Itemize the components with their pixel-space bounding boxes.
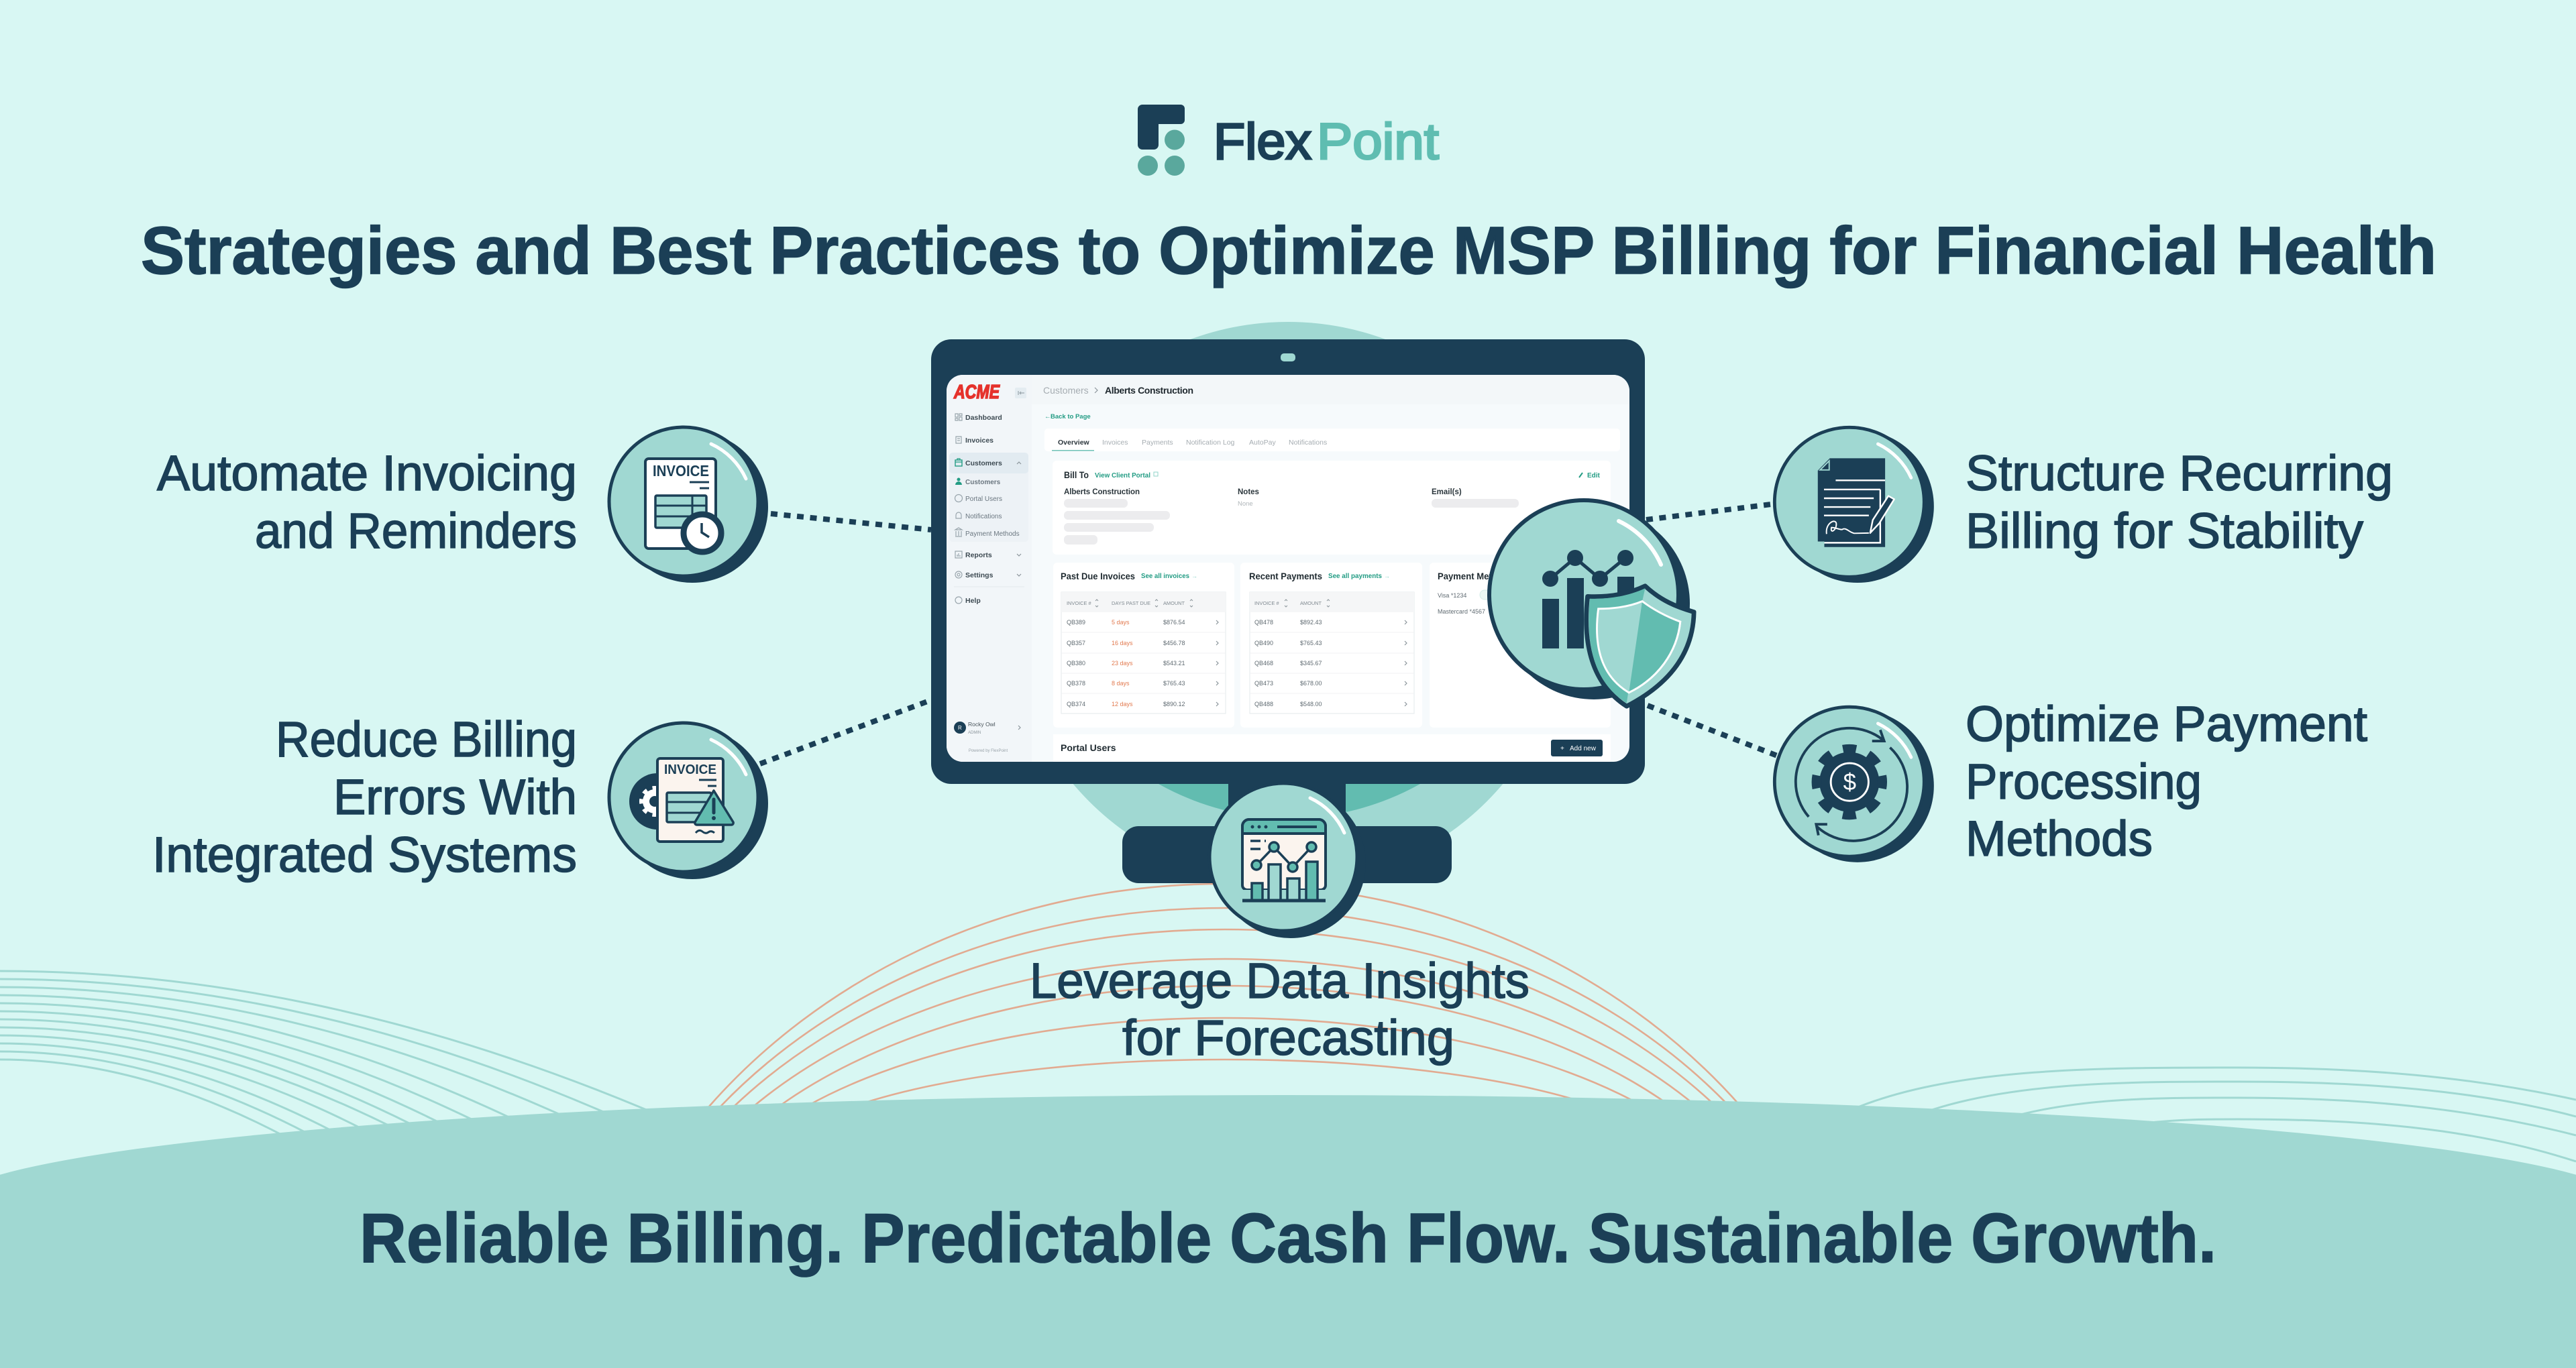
breadcrumb header: ← xyxy=(1044,413,1051,420)
tabs: Payments xyxy=(1142,439,1173,447)
tabs: Notifications xyxy=(1289,439,1327,447)
shield xyxy=(1587,586,1694,706)
label: structure recurring billing xyxy=(1966,445,2393,559)
card: portal users: Portal Users xyxy=(1061,742,1116,753)
card: past due invoices: See all invoices xyxy=(1141,573,1189,580)
card: bill to: None xyxy=(1238,500,1253,508)
icon: gear with dollar sign xyxy=(1774,707,1934,862)
tabs: Invoices xyxy=(1102,439,1128,447)
card: past due invoices: QB357 xyxy=(1067,640,1085,646)
card: recent payments: QB468 xyxy=(1254,660,1273,667)
card: recent payments: $765.43 xyxy=(1300,640,1322,646)
label: automate invoicing xyxy=(157,445,577,559)
card: payment methods: Payment Methods xyxy=(1438,571,1513,581)
icon: signed contract xyxy=(1774,427,1934,583)
breadcrumb header: Back to Page xyxy=(1051,413,1091,420)
sidebar: Payment Methods xyxy=(965,530,1020,538)
card: past due invoices: INVOICE # xyxy=(1067,600,1091,606)
card: recent payments: $678.00 xyxy=(1300,680,1322,687)
card: recent payments: $548.00 xyxy=(1300,701,1322,707)
card: past due invoices: QB374 xyxy=(1067,701,1085,707)
monitor stand xyxy=(1122,778,1452,883)
label: optimize payment processing: Optimize Payment xyxy=(1966,696,2367,752)
sidebar: R xyxy=(958,725,962,731)
label: optimize payment processing xyxy=(1966,696,2367,866)
icon: invoice with clock: INVOICE xyxy=(653,462,709,479)
card: past due invoices: 12 days xyxy=(1112,701,1133,707)
card: portal users: Add new xyxy=(1570,745,1597,752)
card: payment methods: Visa *1234 xyxy=(1438,592,1466,599)
sidebar: Portal Users xyxy=(965,496,1002,503)
background: left teal wave lines xyxy=(0,971,648,1137)
decorative circle behind monitor xyxy=(1007,322,1569,884)
sidebar: Help xyxy=(965,597,981,605)
card: past due invoices: $456.78 xyxy=(1163,640,1185,646)
icon: gear with dollar sign: $ xyxy=(1843,769,1856,795)
card: recent payments: $892.43 xyxy=(1300,619,1322,626)
sidebar: Notifications xyxy=(965,513,1002,520)
card: bill to: View Client Portal xyxy=(1095,472,1150,479)
card: bill to xyxy=(1053,461,1611,555)
card: past due invoices: $890.12 xyxy=(1163,701,1185,707)
card: past due invoices: 8 days xyxy=(1112,680,1130,687)
sidebar: Settings xyxy=(965,571,994,579)
card: portal users xyxy=(1053,734,1611,762)
card: past due invoices: AMOUNT xyxy=(1163,600,1185,606)
label: leverage data insights xyxy=(1030,953,1529,1066)
sidebar: Reports xyxy=(965,551,992,559)
card: payment methods xyxy=(1430,563,1611,728)
icon: invoice with clock xyxy=(609,427,768,583)
icon: invoice with warning and gear: INVOICE xyxy=(664,762,716,777)
breadcrumb header xyxy=(1043,385,1193,420)
background: right teal wave lines xyxy=(1860,1068,2576,1161)
label: optimize payment processing: Processing xyxy=(1966,754,2202,809)
card: bill to: Alberts Construction xyxy=(1064,488,1140,496)
tagline: Reliable Billing. Predictable Cash Flow. Sustainable Growth. xyxy=(360,1200,2216,1277)
monitor xyxy=(931,339,1645,784)
sidebar: Dashboard xyxy=(965,414,1002,422)
label: optimize payment processing: Methods xyxy=(1966,811,2153,866)
label: reduce billing errors: Errors With xyxy=(333,769,577,825)
card: past due invoices: 5 days xyxy=(1112,619,1130,626)
card: past due invoices: 23 days xyxy=(1112,660,1133,667)
card: bill to: Edit xyxy=(1587,472,1601,479)
sidebar: ACME xyxy=(953,382,1000,403)
card: recent payments: $345.67 xyxy=(1300,660,1322,667)
label: structure recurring billing: Structure Recurring xyxy=(1966,445,2393,501)
tabs: Overview xyxy=(1058,439,1090,447)
logo: FlexPoint: Point xyxy=(1317,113,1439,170)
title: Strategies and Best Practices to Optimize MSP Billing for Financial Health xyxy=(141,213,2436,288)
card: recent payments: QB488 xyxy=(1254,701,1273,707)
label: automate invoicing: Automate Invoicing xyxy=(157,445,577,501)
logo: FlexPoint xyxy=(1138,105,1439,176)
breadcrumb header: Alberts Construction xyxy=(1105,385,1193,396)
teal arc under monitor xyxy=(1159,784,1420,818)
card: past due invoices: DAYS PAST DUE xyxy=(1112,600,1150,606)
sidebar: ADMIN xyxy=(968,731,981,735)
camera xyxy=(1281,353,1295,361)
icon: browser analytics window xyxy=(1210,783,1366,938)
sidebar xyxy=(947,375,1629,762)
tabs: AutoPay xyxy=(1249,439,1276,447)
card: bill to: Notes xyxy=(1238,488,1259,496)
breadcrumb header: Customers xyxy=(1043,385,1089,396)
card: recent payments: Recent Payments xyxy=(1249,571,1322,581)
card: past due invoices: QB380 xyxy=(1067,660,1085,667)
card: portal users: + xyxy=(1560,745,1564,752)
sidebar: Rocky Owl xyxy=(968,721,996,728)
card: past due invoices: $543.21 xyxy=(1163,660,1185,667)
label: automate invoicing: and Reminders xyxy=(255,503,577,559)
logo: FlexPoint: Flex xyxy=(1214,113,1311,170)
card: payment methods: Mastercard *4567 xyxy=(1438,608,1485,615)
card: recent payments xyxy=(1240,563,1422,728)
dashboard screen xyxy=(947,375,1629,762)
card: past due invoices: QB378 xyxy=(1067,680,1085,687)
card: recent payments: INVOICE # xyxy=(1254,600,1279,606)
bottom hill band xyxy=(0,1095,2576,1368)
tabs xyxy=(1044,429,1620,451)
card: recent payments: QB473 xyxy=(1254,680,1273,687)
icon: chart with shield xyxy=(1489,500,1694,706)
card: recent payments: → xyxy=(1384,573,1390,579)
label: leverage data insights: for Forecasting xyxy=(1122,1010,1454,1066)
card: past due invoices: Past Due Invoices xyxy=(1061,571,1135,581)
label: reduce billing errors xyxy=(152,711,577,882)
card: recent payments: QB478 xyxy=(1254,619,1273,626)
sidebar: Customers xyxy=(965,459,1002,467)
icon: invoice with warning and gear xyxy=(609,723,768,879)
card: past due invoices: $876.54 xyxy=(1163,619,1185,626)
sidebar: Customers xyxy=(965,479,1001,486)
card: recent payments: See all payments xyxy=(1328,573,1382,580)
tabs: Notification Log xyxy=(1186,439,1235,447)
sidebar: Invoices xyxy=(965,437,994,445)
background: orange concentric arcs xyxy=(709,884,1741,1106)
card: bill to: Bill To xyxy=(1064,469,1089,480)
card: past due invoices xyxy=(1053,563,1234,728)
card: past due invoices: QB389 xyxy=(1067,619,1085,626)
card: recent payments: AMOUNT xyxy=(1300,600,1322,606)
card: past due invoices: $765.43 xyxy=(1163,680,1185,687)
label: structure recurring billing: Billing for Stability xyxy=(1966,503,2363,559)
card: bill to: Email(s) xyxy=(1432,488,1462,496)
label: leverage data insights: Leverage Data Insights xyxy=(1030,953,1529,1009)
card: recent payments: QB490 xyxy=(1254,640,1273,646)
label: reduce billing errors: Integrated Systems xyxy=(152,827,577,882)
sidebar: Powered by FlexPoint xyxy=(969,749,1008,753)
card: past due invoices: → xyxy=(1191,573,1197,579)
label: reduce billing errors: Reduce Billing xyxy=(276,711,577,767)
card: past due invoices: 16 days xyxy=(1112,640,1133,646)
dotted connectors xyxy=(760,504,1779,764)
